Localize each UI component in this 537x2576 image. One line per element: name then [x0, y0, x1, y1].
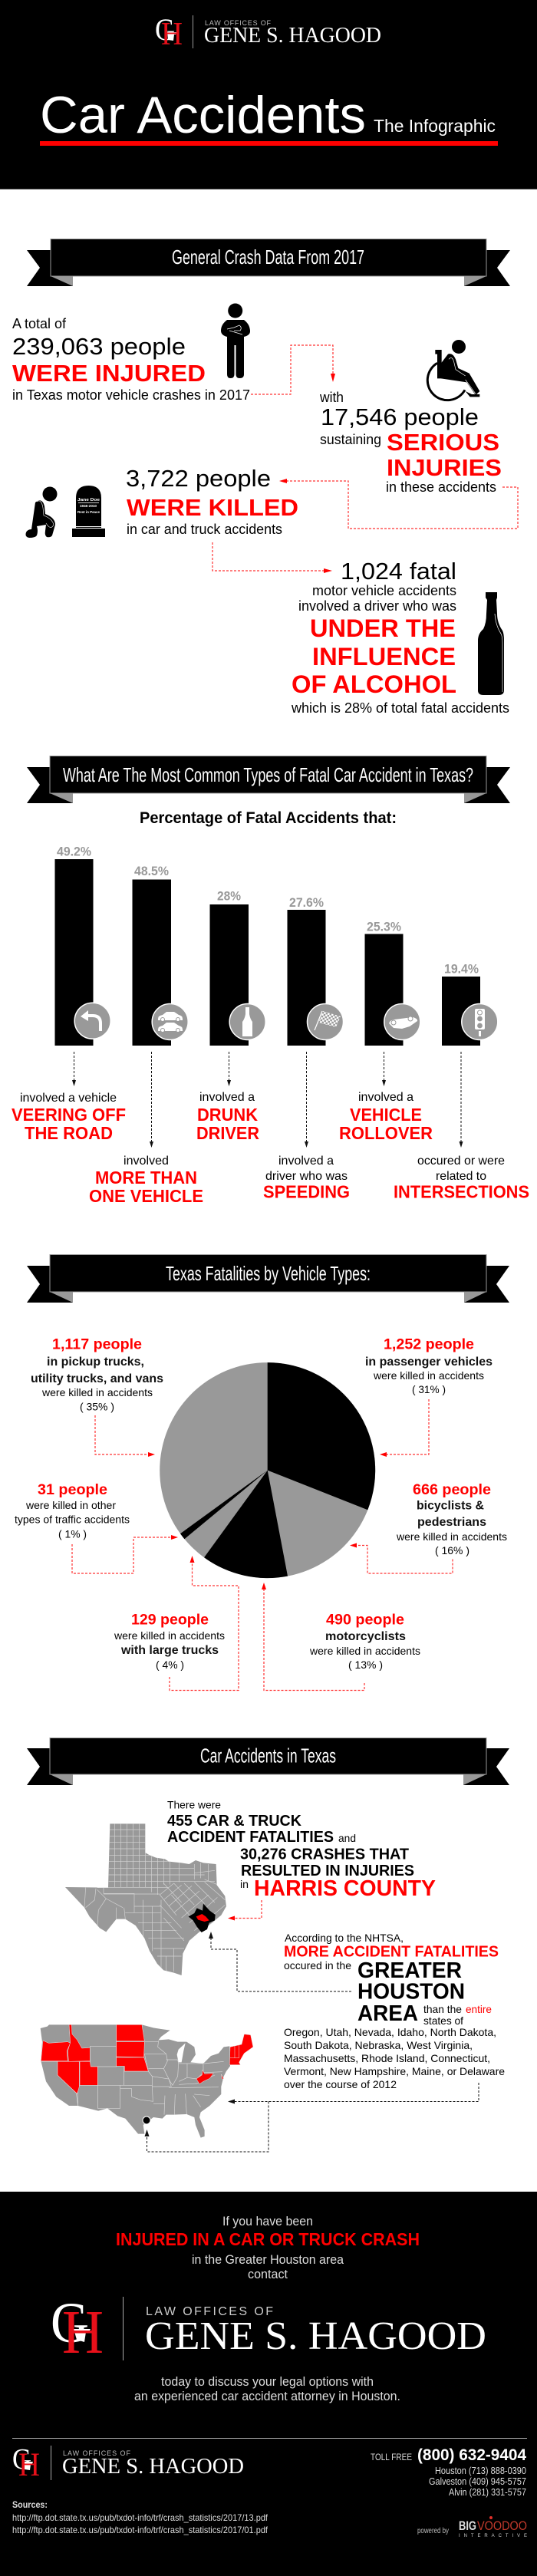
- sources: http://ftp.dot.state.tx.us/pub/txdot-info/trf/crash_statistics/2017/01.pdf: [12, 2525, 268, 2535]
- arrows: bars to labels: [72, 1052, 463, 1148]
- text block: people killed: WERE KILLED: [127, 494, 298, 521]
- arrow: Harris County to map: [228, 1900, 262, 1921]
- call to action text top: contact: [248, 2267, 288, 2281]
- label: drunk driver: involved a: [199, 1091, 255, 1104]
- text block: Greater Houston: Vermont, New Hampshire, Maine, or Delaware: [284, 2065, 505, 2077]
- bar: rollover: [365, 919, 404, 1046]
- label: veering off the road: THE ROAD: [25, 1123, 113, 1143]
- logo: Gene S. Hagood: LAW OFFICES OF: [205, 19, 272, 27]
- label: intersections: related to: [436, 1170, 486, 1183]
- bar: intersections: [442, 962, 480, 1046]
- callout: large trucks: 129 people: [131, 1612, 209, 1628]
- callout: large trucks: were killed in accidents: [114, 1629, 225, 1642]
- callout: motorcyclists: motorcyclists: [325, 1630, 406, 1643]
- lake michigan: [177, 2043, 186, 2062]
- text block: Greater Houston: AREA: [357, 2001, 418, 2026]
- contact phone numbers: (800) 632-9404: [417, 2446, 526, 2464]
- callout: passenger vehicles: 1,252 people: [384, 1336, 474, 1353]
- callout: motorcyclists: ( 13% ): [348, 1659, 383, 1671]
- callout: bicyclists and pedestrians: were killed in accidents: [396, 1530, 507, 1543]
- logo: small: [12, 2443, 244, 2483]
- heading: car accidents in Texas ribbon: Car Accidents in Texas: [200, 1744, 336, 1767]
- text block: Greater Houston: over the course of 2012: [284, 2078, 397, 2090]
- text block: under the influence: which is 28% of total fatal accidents: [291, 700, 509, 716]
- call to action text top: INJURED IN A CAR OR TRUCK CRASH: [116, 2229, 420, 2249]
- callout: motorcyclists: 490 people: [326, 1612, 404, 1628]
- text block: under the influence: motor vehicle accidents: [312, 583, 456, 598]
- logo: large: LAW OFFICES OF: [146, 2305, 273, 2318]
- sources: [12, 2499, 268, 2535]
- text block: people injured: in Texas motor vehicle crashes in 2017: [12, 387, 250, 403]
- icon: tombstone: Jane Doe: [77, 498, 100, 502]
- text block: serious injuries: [319, 390, 502, 495]
- text block: Harris County: RESULTED IN INJURIES: [241, 1863, 414, 1879]
- red states: [41, 2024, 253, 2093]
- label: vehicle rollover: involved a: [358, 1091, 413, 1104]
- call to action text top: in the Greater Houston area: [192, 2252, 344, 2267]
- call to action text top: If you have been: [222, 2214, 313, 2228]
- logo: large: G: [51, 2291, 89, 2355]
- heading: General Crash Data ribbon: General Crash Data From 2017: [172, 245, 364, 268]
- callout: other traffic: ( 1% ): [58, 1528, 87, 1540]
- callout: pickup trucks: ( 35% ): [80, 1401, 114, 1413]
- logo: Big Voodoo Interactive: INTERACTIVE: [459, 2534, 527, 2538]
- text block: under the influence: [291, 558, 509, 716]
- map: United States: [41, 2024, 253, 2138]
- logo: Big Voodoo Interactive: BIG: [459, 2518, 476, 2533]
- state boundaries: [41, 2024, 224, 2115]
- chart title: Percentage of Fatal Accidents that:: [140, 809, 397, 827]
- call to action text bottom: today to discuss your legal options with: [161, 2374, 374, 2389]
- sources: http://ftp.dot.state.tx.us/pub/txdot-info/trf/crash_statistics/2017/13.pdf: [12, 2512, 268, 2523]
- callout: other traffic: 31 people: [38, 1482, 107, 1498]
- callout: large trucks: ( 4% ): [156, 1659, 184, 1671]
- text block: Greater Houston: MORE ACCIDENT FATALITIES: [284, 1944, 499, 1961]
- text block: Harris County: HARRIS COUNTY: [254, 1876, 436, 1901]
- callout: bicyclists and pedestrians: pedestrians: [417, 1516, 486, 1529]
- bar: speeding: [287, 895, 325, 1046]
- text block: under the influence: INFLUENCE: [312, 643, 456, 670]
- arrow: Greater Houston to Texas map: [209, 1932, 351, 1991]
- text block: people injured: 239,063 people: [12, 333, 186, 360]
- callout: pickup trucks: [31, 1336, 163, 1457]
- callout: other traffic: types of traffic accidents: [15, 1513, 130, 1525]
- text block: people injured: A total of: [12, 316, 67, 331]
- label: speeding: [263, 1155, 350, 1201]
- text block: under the influence: involved a driver who was: [298, 598, 456, 614]
- bar: intersections: 19.4%: [444, 962, 479, 976]
- contact phone numbers: Houston (713) 888-0390: [435, 2466, 526, 2476]
- callout: motorcyclists: [262, 1583, 420, 1691]
- callout: large trucks: with large trucks: [120, 1644, 219, 1657]
- logo: Gene S. Hagood: GENE S. HAGOOD: [204, 24, 381, 48]
- text block: under the influence: UNDER THE: [310, 614, 456, 642]
- callout: bicyclists and pedestrians: bicyclists &: [417, 1499, 484, 1513]
- text block: Greater Houston: occured in the: [284, 1959, 351, 1972]
- icon: tombstone: 1946-2010: [80, 504, 97, 508]
- harris county: [196, 1914, 209, 1922]
- call to action text bottom: an experienced car accident attorney in Houston.: [134, 2389, 400, 2403]
- arrow: serious to killed: [279, 479, 518, 529]
- text block: under the influence: OF ALCOHOL: [292, 670, 456, 698]
- bar chart: fatal accident types: [55, 844, 480, 1046]
- call to action text top: [116, 2214, 420, 2281]
- bar: veering: [55, 844, 94, 1046]
- bar: drunk driver: 28%: [217, 888, 241, 904]
- logo: large: [51, 2291, 486, 2367]
- text block: Greater Houston: [284, 1932, 505, 2090]
- title: [40, 86, 498, 146]
- callout: large trucks: [114, 1556, 239, 1691]
- title: The Infographic: [374, 116, 496, 136]
- label: vehicle rollover: VEHICLE: [350, 1105, 422, 1125]
- label: speeding: involved a: [278, 1155, 334, 1168]
- label: drunk driver: [196, 1091, 259, 1143]
- icon: beer bottle: [478, 592, 504, 695]
- text block: Harris County: ACCIDENT FATALITIES: [167, 1829, 334, 1846]
- text block: people killed: 3,722 people: [126, 465, 271, 492]
- text block: people injured: WERE INJURED: [12, 360, 206, 387]
- logo: large: GENE S. HAGOOD: [145, 2314, 486, 2358]
- callout: passenger vehicles: were killed in accidents: [373, 1369, 484, 1382]
- label: veering off the road: [12, 1092, 126, 1143]
- text block: serious injuries: in these accidents: [386, 479, 496, 495]
- logo: Big Voodoo Interactive: powered by: [417, 2527, 449, 2535]
- icon: wheelchair: [427, 340, 479, 400]
- callout: pickup trucks: 1,117 people: [52, 1336, 142, 1353]
- icon: two cars: [152, 1003, 188, 1040]
- logo: Big Voodoo Interactive: [417, 2516, 527, 2538]
- icon: overturned car: [384, 1003, 420, 1040]
- label: vehicle rollover: [339, 1091, 433, 1143]
- label: intersections: INTERSECTIONS: [394, 1181, 529, 1201]
- logo: large: H: [62, 2299, 104, 2367]
- label: speeding: driver who was: [265, 1170, 348, 1183]
- panel: footer call to action: [0, 2192, 537, 2576]
- text block: Greater Houston: According to the NHTSA,: [285, 1932, 404, 1944]
- text block: serious injuries: 17,546 people: [321, 404, 479, 430]
- text block: Harris County: and: [338, 1832, 356, 1844]
- bar: speeding: 27.6%: [289, 895, 324, 910]
- icon: tombstone: [72, 486, 105, 537]
- icon: kneeling person: [26, 486, 57, 538]
- callout: bicyclists and pedestrians: ( 16% ): [435, 1544, 469, 1556]
- title: Car Accidents: [40, 86, 366, 144]
- callout: passenger vehicles: [365, 1336, 493, 1457]
- text block: Greater Houston: HOUSTON: [357, 1979, 465, 2004]
- text block: serious injuries: sustaining: [320, 432, 381, 447]
- text block: under the influence: 1,024 fatal: [341, 558, 456, 585]
- panel: header: [0, 0, 537, 189]
- callout: bicyclists and pedestrians: 666 people: [413, 1482, 491, 1498]
- label: veering off the road: involved a vehicle: [20, 1092, 117, 1105]
- icon: bottle: [229, 1003, 265, 1040]
- map: Texas counties: [65, 1823, 226, 1975]
- label: drunk driver: DRUNK: [197, 1105, 258, 1125]
- text block: Harris County: 455 CAR & TRUCK: [167, 1813, 302, 1830]
- callout: passenger vehicles: in passenger vehicles: [365, 1356, 493, 1369]
- logo: small: GENE S. HAGOOD: [62, 2455, 244, 2479]
- arrow: injured to serious: [251, 345, 335, 394]
- callout: bicyclists and pedestrians: [350, 1482, 507, 1573]
- contact phone numbers: TOLL FREE: [371, 2452, 412, 2462]
- text block: serious injuries: with: [319, 390, 344, 405]
- label: more than one vehicle: [89, 1155, 203, 1206]
- arrow: states to US map: [144, 2083, 479, 2152]
- callout: other traffic: [15, 1482, 178, 1573]
- marker: Houston dot: [143, 2116, 150, 2124]
- pie chart: fatalities by vehicle type: [160, 1362, 375, 1578]
- call to action text bottom: [134, 2374, 400, 2403]
- text block: Greater Houston: South Dakota, Nebraska, West Virginia,: [284, 2039, 473, 2051]
- label: drunk driver: DRIVER: [196, 1123, 259, 1143]
- icon: tombstone: Rest in Peace: [77, 510, 100, 514]
- text block: serious injuries: INJURIES: [387, 454, 502, 481]
- logo: small: H: [18, 2447, 40, 2483]
- logo: Gene S. Hagood: H: [161, 17, 183, 52]
- text block: Harris County: 30,276 CRASHES THAT: [240, 1846, 409, 1863]
- heading: common types ribbon: [27, 756, 510, 803]
- label: more than one vehicle: ONE VEHICLE: [89, 1186, 203, 1206]
- callout: pickup trucks: in pickup trucks,: [47, 1356, 144, 1369]
- text block: Greater Houston: states of: [423, 2014, 463, 2027]
- text block: Harris County: There were: [167, 1798, 221, 1810]
- text block: Greater Houston: entire: [466, 2003, 492, 2015]
- text block: Harris County: [167, 1798, 436, 1901]
- bar: more than one vehicle: [132, 864, 171, 1046]
- bar: drunk driver: [210, 888, 249, 1046]
- bar: more than one vehicle: 48.5%: [134, 864, 169, 878]
- text block: Greater Houston: Oregon, Utah, Nevada, Idaho, North Dakota,: [284, 2026, 496, 2038]
- icon: traffic light: [462, 1003, 498, 1040]
- label: speeding: SPEEDING: [263, 1181, 350, 1201]
- text block: people injured: [12, 316, 250, 403]
- sources: Sources:: [12, 2499, 48, 2510]
- callout: passenger vehicles: ( 31% ): [412, 1383, 446, 1395]
- logo: small: G: [12, 2443, 31, 2476]
- callout: motorcyclists: were killed in accidents: [309, 1645, 420, 1657]
- label: intersections: [394, 1155, 529, 1201]
- icon: checkered flag: [307, 1003, 344, 1040]
- contact phone numbers: Galveston (409) 945-5757: [429, 2476, 526, 2487]
- text block: people killed: [126, 465, 298, 537]
- text block: Harris County: in: [240, 1878, 249, 1890]
- text block: Greater Houston: than the: [423, 2003, 462, 2015]
- heading: vehicle types ribbon: Texas Fatalities by Vehicle Types:: [166, 1262, 371, 1285]
- label: veering off the road: VEERING OFF: [12, 1105, 126, 1125]
- logo: Gene S. Hagood: G: [155, 12, 175, 47]
- logo: Big Voodoo Interactive: VOODOO: [477, 2518, 527, 2533]
- callout: pickup trucks: utility trucks, and vans: [31, 1372, 163, 1385]
- label: more than one vehicle: MORE THAN: [95, 1168, 197, 1188]
- text block: Greater Houston: Massachusetts, Rhode Island, Connecticut,: [284, 2052, 490, 2064]
- arrow: killed to alcohol: [212, 542, 332, 573]
- bar: veering: 49.2%: [57, 844, 91, 859]
- label: more than one vehicle: involved: [124, 1155, 169, 1168]
- icon: left turn: [74, 1003, 110, 1039]
- heading: car accidents in Texas ribbon: [27, 1738, 509, 1785]
- callout: pickup trucks: were killed in accidents: [41, 1386, 153, 1398]
- icon: injured person: [221, 304, 250, 378]
- logo: small: LAW OFFICES OF: [63, 2449, 130, 2457]
- callout: other traffic: were killed in other: [25, 1499, 116, 1511]
- logo: Gene S. Hagood: [155, 12, 381, 52]
- heading: General Crash Data ribbon: [27, 239, 510, 286]
- contact phone numbers: Alvin (281) 331-5757: [449, 2487, 526, 2498]
- contact phone numbers: [371, 2446, 526, 2498]
- text block: serious injuries: SERIOUS: [387, 429, 499, 456]
- text block: Greater Houston: GREATER: [357, 1958, 462, 1983]
- label: intersections: occured or were: [417, 1155, 505, 1168]
- bar: rollover: 25.3%: [367, 919, 401, 934]
- text block: people killed: in car and truck accidents: [127, 522, 282, 537]
- label: vehicle rollover: ROLLOVER: [339, 1123, 433, 1143]
- heading: vehicle types ribbon: [27, 1255, 509, 1303]
- harris area: black surrounding counties: [189, 1904, 216, 1932]
